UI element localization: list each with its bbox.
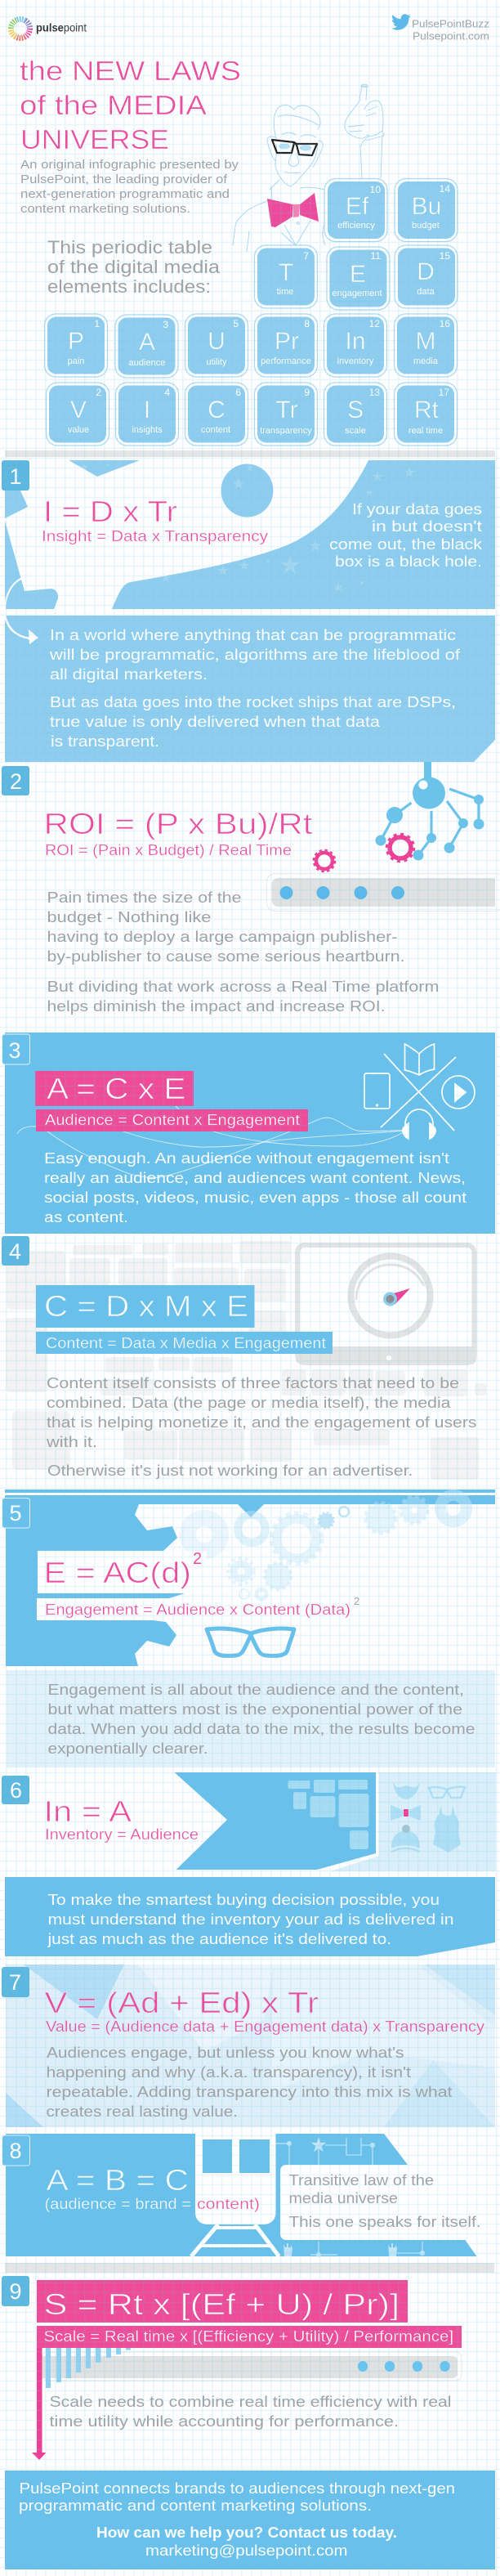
element: Ef: 10 [370,184,381,195]
element: Rt: Rt [414,396,440,423]
ROI paragraphs: helps diminish the impact and increase ROI. [47,997,386,1015]
equation 9 caption box: Scale = Real time x [(Efficiency + Utility) / Performance] [44,2327,453,2345]
equation 2: ROI = (P x Bu)/Rt [44,807,312,840]
blue ad-block shape [175,1772,376,1870]
element: S: scale [345,426,366,436]
section 4: content law [2,1236,486,1480]
twitter handle and website: PulsePointBuzz [412,18,489,29]
audience paragraph [44,1149,467,1225]
element: U [185,314,248,377]
rocket illustration [5,460,495,609]
ROI paragraphs: budget - Nothing like [47,908,211,925]
panel: inventory text [5,1877,495,1956]
section 8: transitive law [2,2134,495,2257]
arrow [5,616,38,644]
descending blue bars [46,2348,131,2388]
audience paragraph: as content. [44,1208,128,1225]
element: A [115,315,178,378]
element: D [395,245,458,308]
element: In: inventory [337,356,374,366]
equation 4 caption box [36,1332,333,1354]
programmatic paragraphs: In a world where anything that can be programmatic [50,626,456,643]
element: Bu: Bu [412,193,441,220]
audience paragraph: really an audience, and audiences want content. News, [44,1169,466,1186]
element: Pr [255,314,317,377]
value paragraph: repeatable. Adding transparency into this mix is what [46,2083,453,2100]
blue track shape [6,2134,477,2256]
footer panel: contact: programmatic and content marketing solutions. [19,2497,372,2514]
number tile 6: 6 [10,1778,22,1803]
element: V: 2 [96,387,101,398]
element: C [185,383,248,446]
section 2: ROI law [2,762,500,1015]
conveyor [266,873,500,911]
pink arrow [32,2346,46,2460]
element: U: utility [206,357,227,367]
divider bar [5,450,495,457]
background gears [188,1495,467,1599]
element: D: data [417,287,435,297]
equation 3 caption box [36,1109,308,1131]
element: In: 12 [369,318,380,329]
number tile 4: 4 [9,1239,21,1264]
number tile 3: 3 [8,1038,21,1063]
element: Bu: 14 [440,183,450,195]
divider bar [5,2263,494,2273]
element: Rt [394,383,458,446]
periodic table intro: of the digital media [47,257,221,277]
intro text: PulsePoint, the leading provider of [20,172,228,186]
element: A: audience [129,358,165,368]
twitter handle and website: Pulsepoint.com [413,29,489,43]
element: Rt: 17 [439,387,449,398]
element: A: 3 [163,319,168,330]
number tile 5 [2,1498,29,1528]
element: Ef: efficiency [337,221,375,231]
section 1: insight law [2,460,495,609]
element: I [116,383,178,446]
content paragraphs: Content itself consists of three factors that need to be [47,1374,459,1391]
section 9: scale law [2,2276,462,2460]
element: Tr: Tr [275,396,298,423]
element: Pr: Pr [275,328,299,355]
element: A: A [139,329,155,356]
audience paragraph: Easy enough. An audience without engagement isn't [44,1149,449,1167]
element: T [255,245,317,308]
element: I: insights [132,425,163,435]
footer panel: contact: marketing@pulsepoint.com [145,2542,348,2559]
number tile 8: 8 [9,2139,22,2163]
audience paragraph: social posts, videos, music, even apps - those all count [44,1189,467,1206]
equation 8 caption: content) [197,2195,260,2212]
number tile 2: 2 [10,769,22,794]
intro text [20,158,239,216]
callout: transitive law: media universe [289,2189,398,2206]
value paragraph [46,2044,453,2120]
number tile 1 [2,460,29,491]
title: UNIVERSE [20,124,169,155]
ROI paragraphs [47,889,440,1015]
callout: transitive law: This one speaks for itself. [289,2213,480,2230]
element: D: 15 [440,250,450,262]
equation 7: V = (Ad + Ed) x Tr [44,1986,319,2019]
scale paragraph [49,2393,451,2430]
equation 5: 2 [193,1550,202,1568]
section 5: engagement law [2,1490,495,1666]
programmatic paragraphs: all digital marketers. [50,665,208,683]
panel: inventory text: just as much as the audience it's delivered to. [47,1930,391,1947]
panel: engagement text [7,1670,495,1767]
title: of the MEDIA [20,90,207,120]
headphone wires [17,1106,404,1177]
equation 2 caption: ROI = (Pain x Budget) / Real Time [45,841,292,858]
element: U: U [208,328,225,355]
section 7: value law [2,1964,495,2127]
element: T: 7 [303,250,309,262]
element: M [394,314,458,377]
equation 7 caption: Value = (Audience data + Engagement data) x Transparency [46,2018,485,2035]
panel: inventory text: must understand the inventory your ad is delivered in [47,1911,454,1928]
icon: glasses [207,1628,294,1655]
panel: engagement text: exponentially clearer. [47,1740,208,1757]
scale paragraph: time utility while accounting for performance. [49,2412,399,2430]
number tile 5: 5 [9,1501,22,1525]
equation 8 caption: (audience = brand = [44,2195,191,2212]
number tile 2 [2,766,29,795]
content paragraphs: that is helping monetize it, and the engagement of users [47,1413,477,1431]
title [20,56,241,155]
programmatic paragraphs: But as data goes into the rocket ships that are DSPs, [50,693,456,710]
title: the NEW LAWS [20,56,241,86]
element: T: T [279,259,293,286]
programmatic paragraphs: true value is only delivered when that data [50,713,381,730]
top bars [5,1490,495,1517]
element: Pr: performance [261,356,311,366]
number tile 7: 7 [9,1970,21,1995]
element: V: V [70,396,87,423]
value paragraph: happening and why (a.k.a. transparency), it isn't [46,2063,411,2081]
callout: transitive law: Transitive law of the [289,2171,434,2188]
footer panel: contact: How can we help you? Contact us today. [96,2524,397,2541]
element: Bu [395,178,458,242]
periodic table intro [47,237,221,297]
footer panel: contact: PulsePoint connects brands to audiences through next-gen [20,2480,455,2497]
footer panel: contact [5,2471,495,2569]
element: Bu: budget [412,221,440,231]
element: M: media [413,356,439,366]
element: C: 6 [235,387,241,398]
value paragraph: Audiences engage, but unless you know what's [47,2044,404,2061]
panel: inventory text: To make the smartest buying decision possible, you [47,1891,440,1908]
logo: pulsepoint: pulsepoint [36,21,87,34]
section 6: inventory law [2,1772,496,1871]
element: U: 5 [233,318,239,329]
equation 9 caption box [37,2326,462,2348]
element: P: 1 [94,318,100,329]
illustration: scientist with flask [233,84,384,252]
intro text: An original infographic presented by [20,158,239,172]
element: Tr [255,383,317,446]
faceted background [6,1964,495,2127]
element: Ef: Ef [346,193,369,220]
equation 1: I = D x Tr [43,495,177,528]
equation 5: E = AC(d) [44,1556,191,1589]
equation 4 box [36,1285,255,1328]
programmatic paragraphs: will be programmatic, algorithms are the lifeblood of [49,646,461,663]
equation 6 caption: Inventory = Audience [45,1826,199,1843]
ROI paragraphs: But dividing that work across a Real Time platform [47,978,440,995]
equation 3 box: A = C x E [47,1072,186,1105]
intro text: next-generation programmatic and [20,187,230,201]
right panel with audience icons [330,1772,496,1871]
number tile 6 [2,1776,29,1804]
scale paragraph: Scale needs to combine real time efficiency with real [49,2393,451,2410]
equation 8: A = B = C [46,2163,189,2197]
element: P: P [68,328,84,355]
black hole text: in but doesn't [372,517,482,535]
train illustration [191,2134,279,2256]
number tile 9: 9 [9,2279,22,2304]
number tile 9 [2,2276,29,2306]
element: C: content [201,425,230,435]
logo: pulsepoint [11,19,87,38]
ROI paragraphs: Pain times the size of the [47,889,242,906]
number tile 1: 1 [9,464,22,489]
element: P: pain [68,356,84,366]
element: I: 4 [164,387,170,398]
element: V [46,383,109,446]
equation 5 [38,1550,207,1593]
element: Ef [324,178,387,242]
blue gear shape [6,1504,185,1666]
black hole text [329,500,483,570]
element: E: E [350,261,366,288]
black hole text: come out, the black [329,535,483,553]
element: C: C [208,396,225,423]
element: Pr: 8 [304,318,310,329]
number tile 3 [2,1034,29,1064]
element: I: I [144,396,150,423]
black hole text: If your data goes [352,500,482,517]
number tile 8 [2,2135,29,2166]
element: In: In [345,328,366,355]
element: P [44,314,108,377]
equation 4 box: C = D x M x E [44,1289,248,1323]
element: M: 16 [440,318,450,329]
robot arm [376,762,484,860]
black hole text: box is a black hole. [335,553,482,570]
equation 4 caption box: Content = Data x Media x Engagement [46,1334,326,1351]
twitter handle and website [391,14,489,43]
element: E: 11 [371,250,381,262]
element: S: 13 [369,387,380,398]
element: Tr: 9 [304,387,310,398]
equation 8 caption [44,2195,260,2212]
equation 6: In = A [44,1794,132,1828]
element: V: value [68,425,89,435]
content paragraphs: with it. [46,1433,97,1450]
element: T: time [277,287,293,297]
number tile 7 [2,1967,29,1997]
content paragraphs: Otherwise it's just not working for an advertiser. [47,1462,413,1479]
icon: gears [314,834,413,871]
element: Tr: transparency [260,426,312,436]
panel: engagement text: but what matters most is the exponential power of the [47,1700,462,1718]
equation 3 caption box: Audience = Content x Engagement [45,1111,300,1128]
media icons [364,1044,475,1139]
programmatic paragraphs [49,626,461,750]
panel: programmatic text [5,616,495,762]
section 3: audience law [2,1033,495,1234]
equation 9 box [37,2280,408,2323]
element: E: engagement [332,289,382,298]
ROI paragraphs: having to deploy a large campaign publisher- [47,928,397,945]
equation 9 box: S = Rt x [(Ef + U) / Pr)] [44,2287,400,2321]
element: S: S [347,396,364,423]
content paragraphs: combined. Data (the page or media itself), the media [47,1394,451,1411]
equation 5 caption: 2 [354,1595,359,1607]
periodic table intro: This periodic table [47,237,212,258]
element: Rt: real time [408,426,443,436]
circuit decoration [275,2137,425,2257]
equation 5 caption [45,1595,359,1618]
programmatic paragraphs: is transparent. [51,732,159,750]
periodic table intro: elements includes: [47,276,211,297]
content paragraphs [46,1374,477,1479]
panel: engagement text: Engagement is all about the audience and the content, [47,1681,464,1698]
element: E [327,247,390,310]
ROI paragraphs: by-publisher to cause some serious heartburn. [47,948,404,965]
callout: transitive law [280,2165,495,2240]
equation 1 caption: Insight = Data x Transparency [42,527,269,544]
element: In [324,314,387,377]
element: S [324,383,387,446]
intro text: content marketing solutions. [20,202,190,216]
background blocks [6,1241,486,1480]
element: M: M [415,328,436,355]
tablet with gauge [296,1245,476,1364]
number tile 4 [2,1236,29,1266]
value paragraph: creates real lasting value. [46,2103,238,2120]
element: D: D [417,258,435,285]
conveyor [42,2352,462,2381]
panel: engagement text: data. When you add data to the mix, the results become [47,1720,475,1737]
equation 5 caption: Engagement = Audience x Content (Data) [45,1601,350,1618]
periodic table of elements [44,178,458,446]
